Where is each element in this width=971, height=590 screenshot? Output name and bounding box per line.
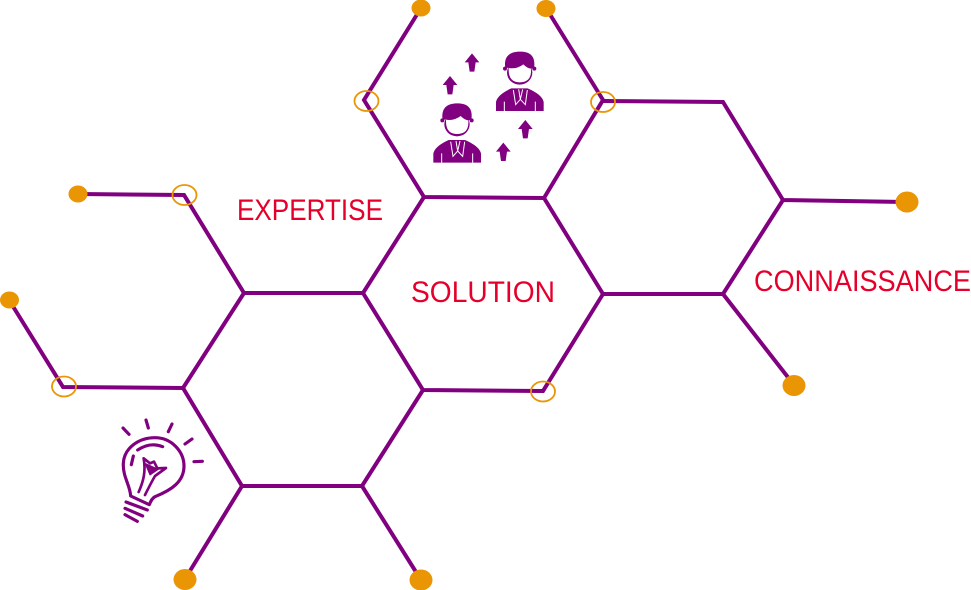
- label: solution: SOLUTION: [411, 276, 555, 309]
- right hexagon: [544, 101, 907, 385]
- icon: light bulb: [123, 420, 202, 521]
- centre hexagon: [363, 197, 603, 391]
- left upper hexagon: [78, 194, 363, 388]
- icon: people with arrows: [433, 52, 544, 163]
- bottom hexagon: [183, 388, 423, 580]
- person right: [496, 52, 544, 111]
- arrows: [443, 53, 533, 161]
- far left branch: [9, 300, 183, 388]
- top hexagon branch: [364, 8, 603, 198]
- label: expertise: EXPERTISE: [237, 194, 383, 227]
- person left: [433, 103, 481, 163]
- orange rings: [52, 91, 615, 402]
